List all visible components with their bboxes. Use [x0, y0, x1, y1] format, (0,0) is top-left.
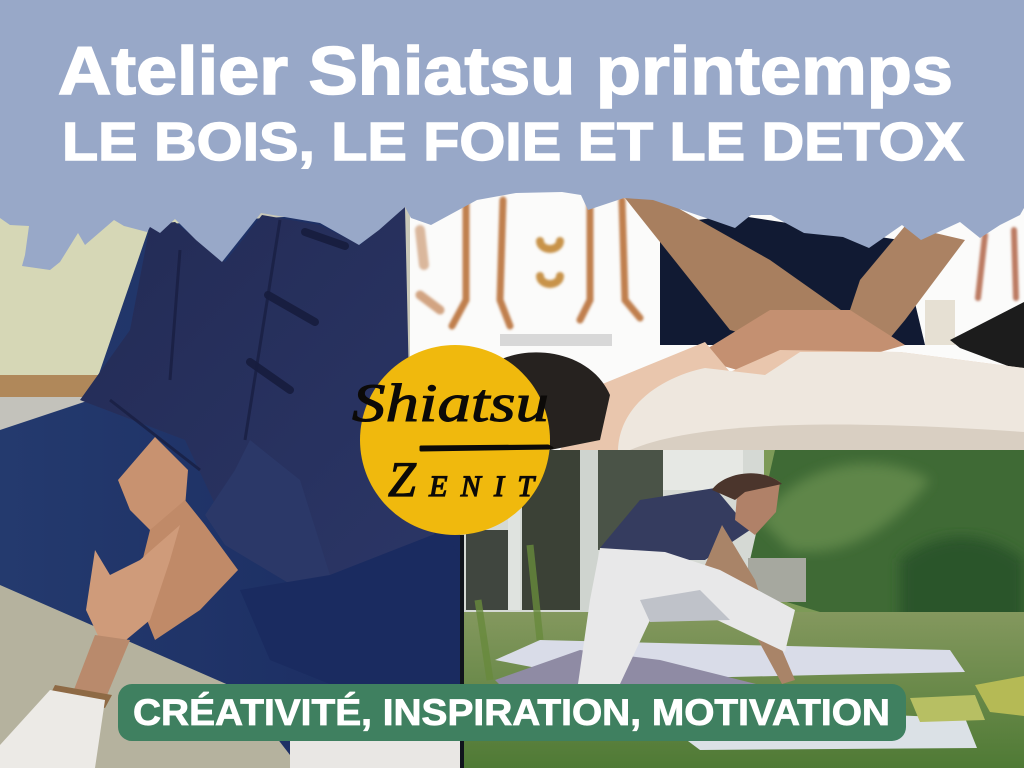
- banner: green pill: [118, 684, 906, 741]
- logo: Shiatsu Zenit: [352, 345, 552, 535]
- hair: [500, 352, 610, 450]
- client body: [950, 302, 1024, 372]
- arms: [625, 198, 841, 332]
- thin gaps between photos: [460, 535, 464, 768]
- hands: [118, 437, 188, 535]
- therapist torso: [660, 215, 925, 345]
- logo: Shiatsu Zenit: Shiatsu: [352, 373, 549, 433]
- panel: left photo, hands and navy outfit: [0, 190, 460, 768]
- logo: Shiatsu Zenit: Z ENIT: [388, 451, 536, 507]
- banner: green pill: CRÉATIVITÉ, INSPIRATION, MOTIVATION: [133, 692, 890, 733]
- person: [600, 488, 750, 560]
- panel: top right photo, back massage with anatomy chart: [410, 190, 1024, 450]
- torn blue header: [0, 0, 1024, 270]
- panel: bottom right photo, garden stretch: [464, 450, 1024, 768]
- mats: [495, 640, 965, 680]
- plant: [478, 545, 540, 680]
- anatomy chart: [420, 200, 1016, 326]
- subtitle: LE BOIS, LE FOIE ET LE DETOX: [62, 112, 964, 172]
- title: Atelier Shiatsu printemps: [58, 33, 953, 109]
